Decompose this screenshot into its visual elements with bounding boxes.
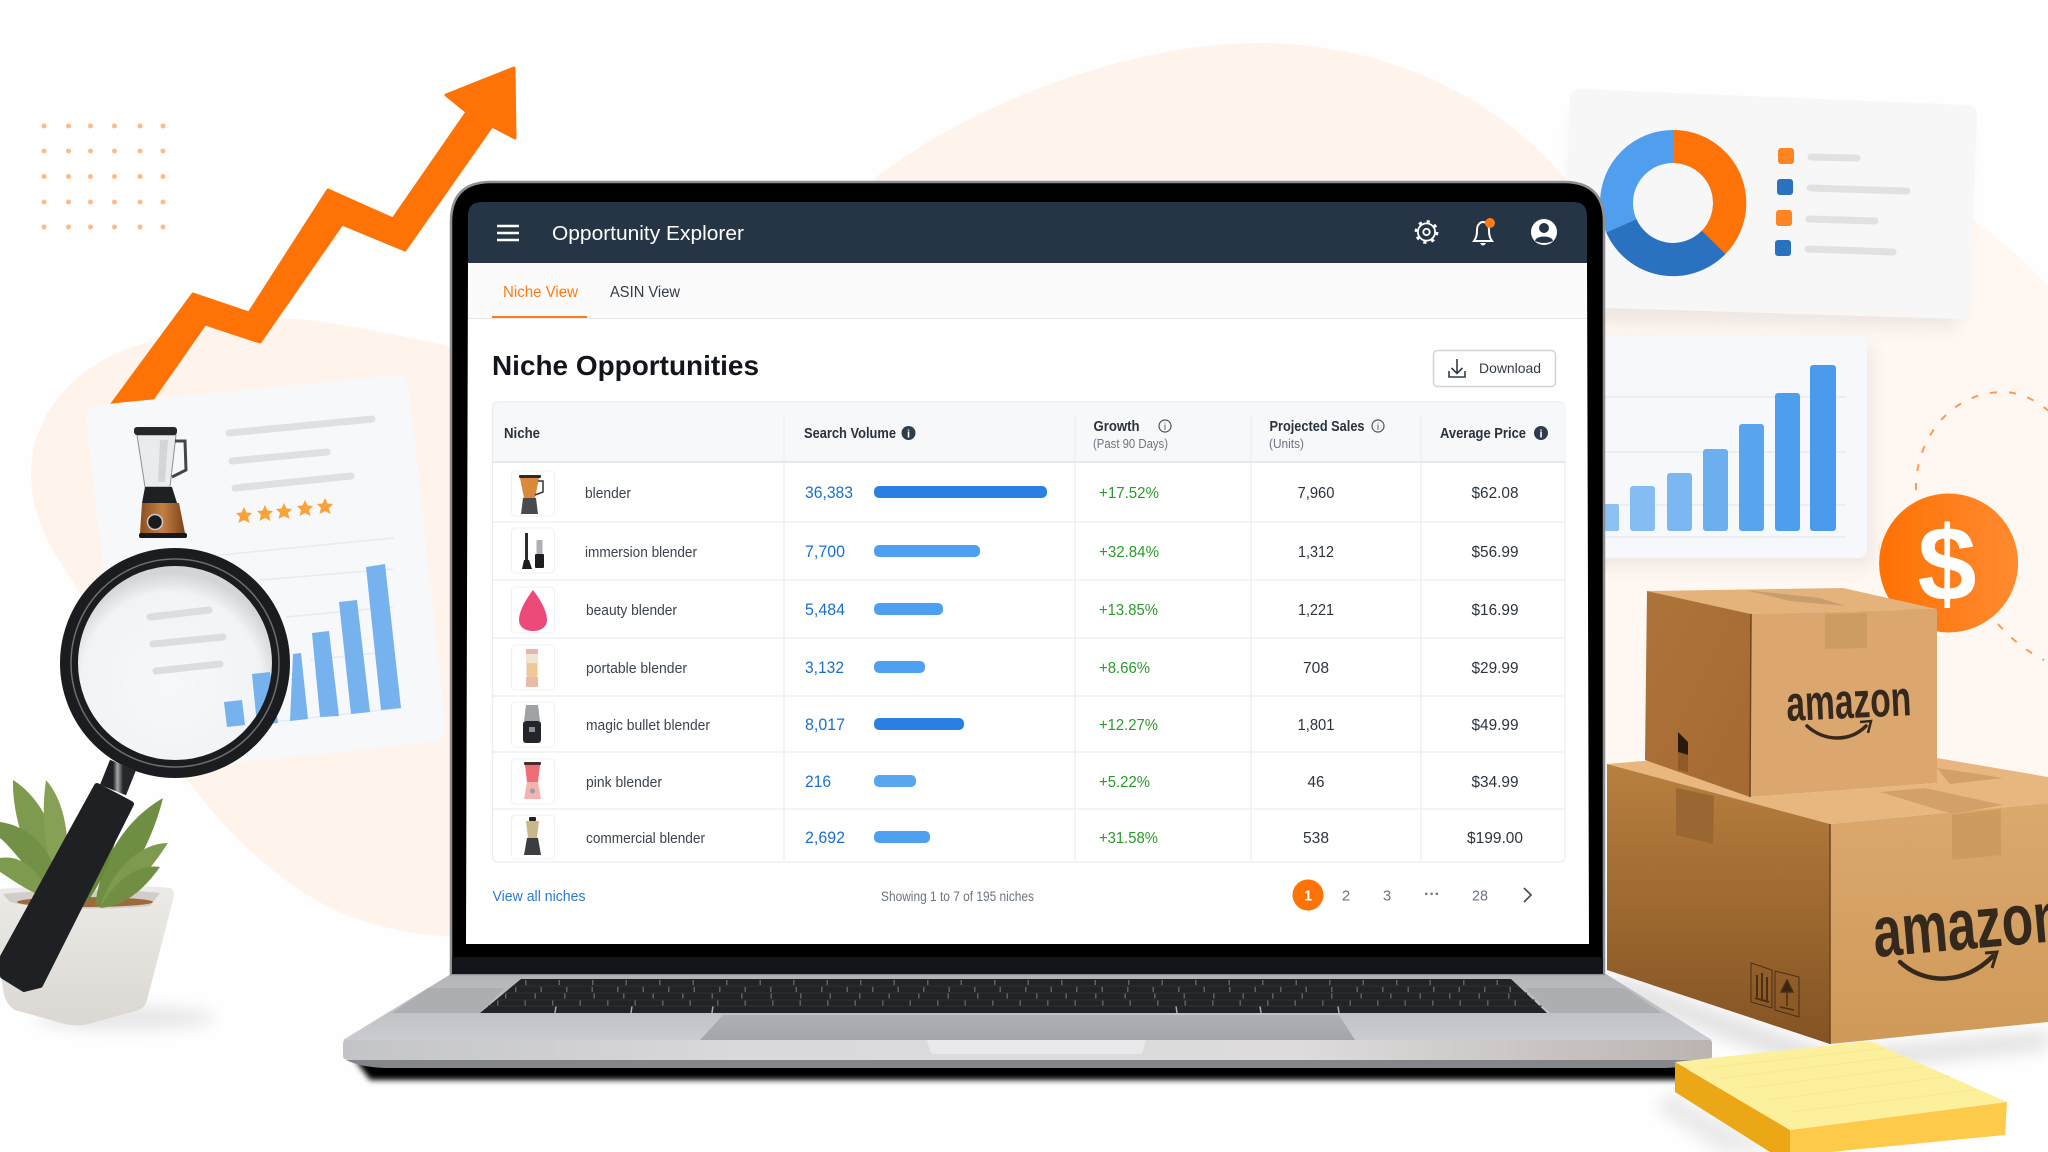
row: pink blender: +5.22% bbox=[1099, 774, 1150, 791]
row: magic bullet blender bbox=[512, 702, 1519, 747]
table header row: (Units) bbox=[1269, 437, 1304, 451]
info icon bbox=[1534, 426, 1548, 440]
row: immersion blender bbox=[512, 528, 1519, 573]
tabs: Niche View bbox=[503, 284, 579, 301]
card grid lines bbox=[160, 538, 402, 734]
screen bbox=[466, 202, 1589, 944]
icon: gear bbox=[1416, 221, 1437, 243]
leaves bbox=[0, 780, 168, 908]
plant in pot bbox=[0, 780, 215, 1030]
arrow: orange upward trend bbox=[109, 68, 515, 408]
row: beauty blender: beauty blender bbox=[586, 602, 677, 619]
thumbnail: immersion bbox=[512, 528, 554, 573]
blender product bbox=[134, 427, 187, 538]
row: beauty blender: +13.85% bbox=[1099, 602, 1158, 619]
soil bbox=[17, 897, 153, 907]
table header row: Projected Sales bbox=[1270, 419, 1364, 435]
handle bbox=[3, 786, 131, 989]
app nav bar bbox=[468, 202, 1587, 263]
row: immersion blender: 7,700 bbox=[805, 543, 845, 561]
table footer: Showing 1 to 7 of 195 niches bbox=[881, 889, 1034, 904]
lens bbox=[77, 565, 273, 761]
row: blender: +17.52% bbox=[1099, 485, 1159, 502]
tabs: ASIN View bbox=[610, 284, 681, 301]
table footer bbox=[492, 880, 1531, 910]
table header row: Search Volume bbox=[804, 426, 896, 442]
table frame bbox=[492, 402, 1565, 862]
sticky note pad bbox=[1655, 1041, 2007, 1152]
table grid lines bbox=[493, 415, 1565, 862]
row: pink blender: $34.99 bbox=[1472, 774, 1519, 791]
bar chart bars bbox=[1600, 365, 1836, 531]
pagination bbox=[1292, 880, 1531, 910]
small box amazon logo bbox=[1785, 670, 1912, 738]
row: portable blender: 708 bbox=[1303, 660, 1329, 677]
pagination: ··· bbox=[1424, 886, 1440, 903]
row: commercial blender: 538 bbox=[1303, 830, 1329, 847]
panel: donut card bbox=[1566, 99, 1967, 328]
row: pink blender bbox=[512, 759, 1519, 804]
row: commercial blender: commercial blender bbox=[586, 830, 705, 847]
laptop lid bbox=[451, 182, 1604, 974]
row: blender: 36,383 bbox=[805, 484, 853, 502]
thumbnail: portable bbox=[512, 645, 554, 690]
info icon outline: i bbox=[1377, 422, 1379, 433]
info icon: i bbox=[1539, 428, 1543, 440]
row: beauty blender: 5,484 bbox=[805, 601, 845, 619]
shipping boxes bbox=[1607, 588, 2048, 1075]
pagination: 3 bbox=[1383, 888, 1391, 904]
pagination: 28 bbox=[1472, 888, 1488, 904]
dashed orbit bbox=[1916, 392, 2048, 660]
bar card grid lines bbox=[1600, 397, 1846, 537]
laptop front edge bbox=[343, 1040, 1712, 1068]
row: blender: $62.08 bbox=[1472, 485, 1519, 502]
info icon: i bbox=[907, 428, 910, 440]
keyboard bbox=[480, 979, 1547, 1013]
row: blender bbox=[512, 471, 1519, 516]
row: immersion blender: 1,312 bbox=[1298, 544, 1334, 561]
laptop bbox=[343, 182, 1712, 1080]
row: portable blender: +8.66% bbox=[1099, 660, 1150, 677]
donut chart bbox=[1606, 130, 1746, 276]
donut legend bbox=[1775, 148, 1907, 256]
bottom bezel band bbox=[452, 957, 1603, 974]
large box bbox=[1607, 758, 2048, 1044]
dot grid decoration bbox=[42, 124, 166, 230]
row: magic bullet blender: 1,801 bbox=[1298, 717, 1335, 734]
tabs bbox=[468, 263, 1587, 318]
row: commercial blender bbox=[512, 815, 1523, 859]
donut card body bbox=[1573, 99, 1967, 309]
pot body bbox=[0, 885, 174, 1025]
row: immersion blender: +32.84% bbox=[1099, 544, 1159, 561]
thumbnail: blender bbox=[512, 471, 554, 516]
row: portable blender bbox=[512, 645, 1519, 690]
download button: Download bbox=[1479, 360, 1541, 376]
table header row: Niche bbox=[504, 426, 540, 442]
row: commercial blender: $199.00 bbox=[1467, 830, 1523, 847]
icon: bell bbox=[1474, 218, 1495, 246]
row: immersion blender: immersion blender bbox=[585, 544, 697, 561]
download button bbox=[1434, 350, 1556, 386]
row: beauty blender bbox=[512, 587, 1519, 633]
row: beauty blender: $16.99 bbox=[1472, 602, 1519, 619]
table header row: Growth bbox=[1094, 419, 1140, 435]
app title: Opportunity Explorer bbox=[552, 222, 744, 245]
row: portable blender: 3,132 bbox=[805, 659, 844, 677]
magnifying glass bbox=[3, 557, 401, 989]
row: magic bullet blender: $49.99 bbox=[1472, 717, 1519, 734]
table header row: (Past 90 Days) bbox=[1093, 437, 1168, 451]
dollar coin: $ bbox=[1918, 505, 1976, 623]
row: commercial blender: 2,692 bbox=[805, 829, 845, 847]
thumbnail: commercial bbox=[512, 815, 554, 859]
collar bbox=[113, 765, 123, 790]
menu icon bbox=[497, 226, 519, 240]
trackpad bbox=[700, 1015, 1355, 1040]
row: pink blender: pink blender bbox=[586, 774, 662, 791]
card text lines bbox=[229, 419, 372, 488]
row: immersion blender: $56.99 bbox=[1472, 544, 1519, 561]
pot shadow bbox=[35, 1006, 215, 1030]
row: magic bullet blender: 8,017 bbox=[805, 716, 845, 734]
laptop base deck bbox=[343, 974, 1712, 1040]
lens ring bbox=[69, 557, 281, 769]
pagination: 2 bbox=[1342, 888, 1350, 904]
table header row: Average Price bbox=[1440, 426, 1526, 442]
thumbnail: pink bbox=[512, 759, 554, 804]
handling icons bbox=[1751, 963, 1799, 1017]
background blobs bbox=[31, 43, 2048, 937]
heading: Niche Opportunities: Niche Opportunities bbox=[492, 350, 759, 381]
lens content lines bbox=[150, 610, 223, 671]
row: pink blender: 46 bbox=[1308, 774, 1325, 791]
laptop drop shadow bbox=[355, 1060, 1695, 1080]
table footer: View all niches bbox=[492, 888, 586, 905]
row: commercial blender: +31.58% bbox=[1099, 830, 1158, 847]
row: magic bullet blender: +12.27% bbox=[1099, 717, 1158, 734]
thumbnail: beauty sponge bbox=[512, 587, 554, 633]
table bbox=[492, 402, 1565, 862]
panel: product card bbox=[98, 387, 434, 761]
info icon outline: i bbox=[1164, 422, 1166, 433]
dollar coin bbox=[1879, 392, 2048, 660]
pagination: 1 bbox=[1304, 888, 1312, 904]
panel: bar chart card bbox=[1590, 336, 1872, 567]
info icon bbox=[902, 426, 916, 440]
small box bbox=[1645, 588, 1937, 797]
row: blender: 7,960 bbox=[1298, 485, 1335, 502]
card chart bars bbox=[224, 564, 401, 727]
bar card shadow bbox=[1590, 345, 1872, 567]
rating stars bbox=[236, 498, 333, 523]
card body bbox=[98, 387, 434, 761]
table header row bbox=[493, 402, 1565, 462]
thumbnail: magic bullet bbox=[512, 702, 554, 747]
row: pink blender: 216 bbox=[805, 773, 831, 791]
row: magic bullet blender: magic bullet blender bbox=[586, 717, 710, 734]
pot inner rim bbox=[3, 890, 160, 909]
row: beauty blender: 1,221 bbox=[1298, 602, 1334, 619]
note shadow bbox=[1655, 1092, 1780, 1152]
info icon outline bbox=[1159, 420, 1171, 433]
icon: user bbox=[1531, 219, 1557, 245]
screen white area bbox=[466, 263, 1589, 944]
small box amazon logo: amazon bbox=[1785, 670, 1912, 732]
row: blender: blender bbox=[585, 485, 631, 502]
donut card shadow bbox=[1566, 115, 1966, 328]
info icon outline bbox=[1372, 420, 1384, 433]
box shadow bbox=[1607, 970, 2048, 1075]
bar card body bbox=[1590, 336, 1867, 558]
row: portable blender: portable blender bbox=[586, 660, 687, 677]
row: portable blender: $29.99 bbox=[1472, 660, 1519, 677]
